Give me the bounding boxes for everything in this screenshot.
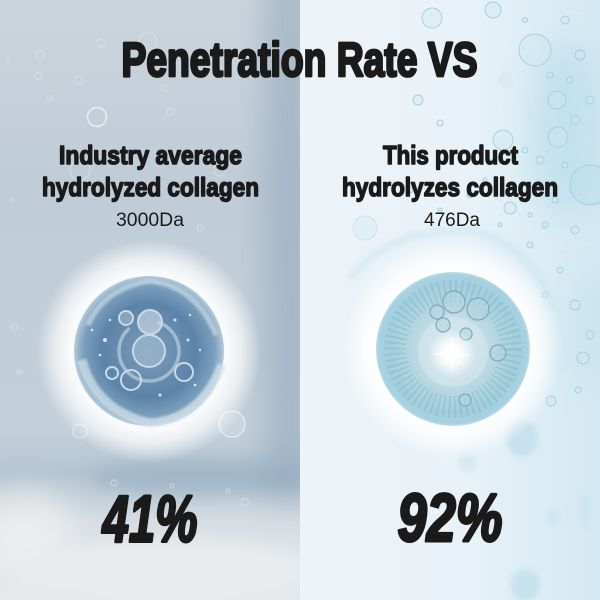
right sphere with glow xyxy=(356,250,558,449)
decorative water droplets, left xyxy=(6,33,248,506)
heading: this product hydrolyzes collagen: hydrolyzes collagen xyxy=(342,172,558,202)
title: Penetration Rate VS xyxy=(122,34,478,87)
stat: 41%: 41% xyxy=(101,482,198,556)
heading: this product hydrolyzes collagen: This product xyxy=(383,140,518,170)
label: 3000Da: 3000Da xyxy=(116,210,184,231)
decorative bubbles, right xyxy=(353,2,600,406)
panel: this product background xyxy=(300,0,600,600)
decorative ring around right sphere xyxy=(348,226,548,298)
left sphere with glow xyxy=(37,239,261,463)
heading: industry average hydrolyzed collagen: hydrolyzed collagen xyxy=(42,172,259,202)
stat: 92%: 92% xyxy=(398,480,502,556)
panel: industry average background xyxy=(0,0,320,600)
heading: this product hydrolyzes collagen xyxy=(342,140,558,202)
label: 476Da: 476Da xyxy=(424,210,480,231)
heading: industry average hydrolyzed collagen: Industry average xyxy=(59,140,242,170)
heading: industry average hydrolyzed collagen xyxy=(42,140,259,202)
starburst xyxy=(431,332,472,375)
